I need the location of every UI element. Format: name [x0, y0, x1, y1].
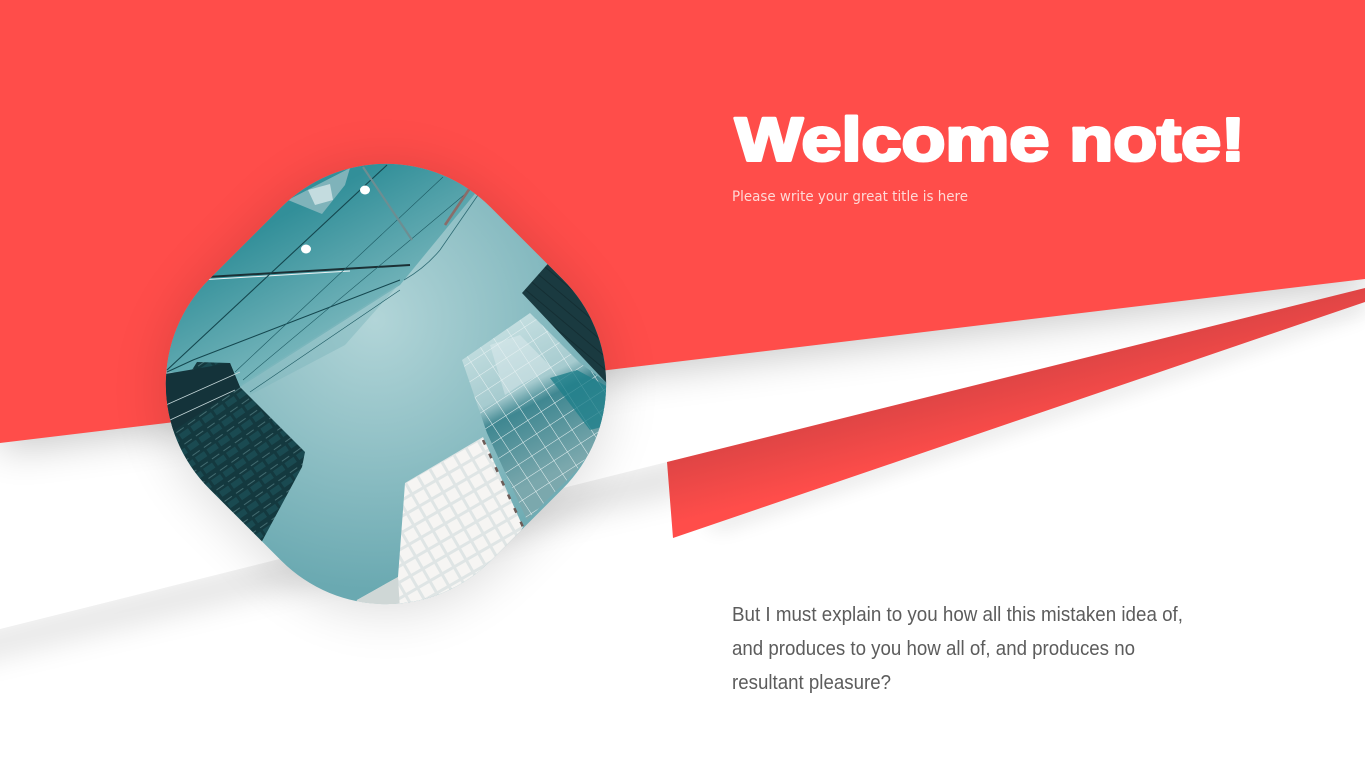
- teal glass tower upper left: [166, 164, 478, 392]
- wedge shadow: [700, 296, 1365, 530]
- glass tower right: [462, 313, 610, 520]
- sky: [166, 164, 606, 604]
- body paragraph: But I must explain to you how all this mistaken idea of,: [732, 604, 1183, 626]
- white tower bottom: [355, 437, 523, 610]
- white diagonal band: [0, 270, 1365, 629]
- red top banner: [0, 0, 1365, 443]
- photo: skyscrapers in rounded diamond: [166, 164, 606, 604]
- top banner shadow: [0, 0, 1365, 450]
- photo shadow: [105, 108, 667, 670]
- dark tower right: [522, 264, 606, 383]
- red wedge: [667, 288, 1365, 538]
- lower band shadow: [0, 462, 690, 678]
- body paragraph: resultant pleasure?: [732, 672, 891, 694]
- title: Welcome note!: [735, 106, 1245, 174]
- dark tower lower left: [166, 362, 305, 542]
- body paragraph: [732, 604, 1183, 694]
- body paragraph: and produces to you how all of, and produces no: [732, 638, 1135, 660]
- subtitle: Please write your great title is here: [732, 189, 968, 205]
